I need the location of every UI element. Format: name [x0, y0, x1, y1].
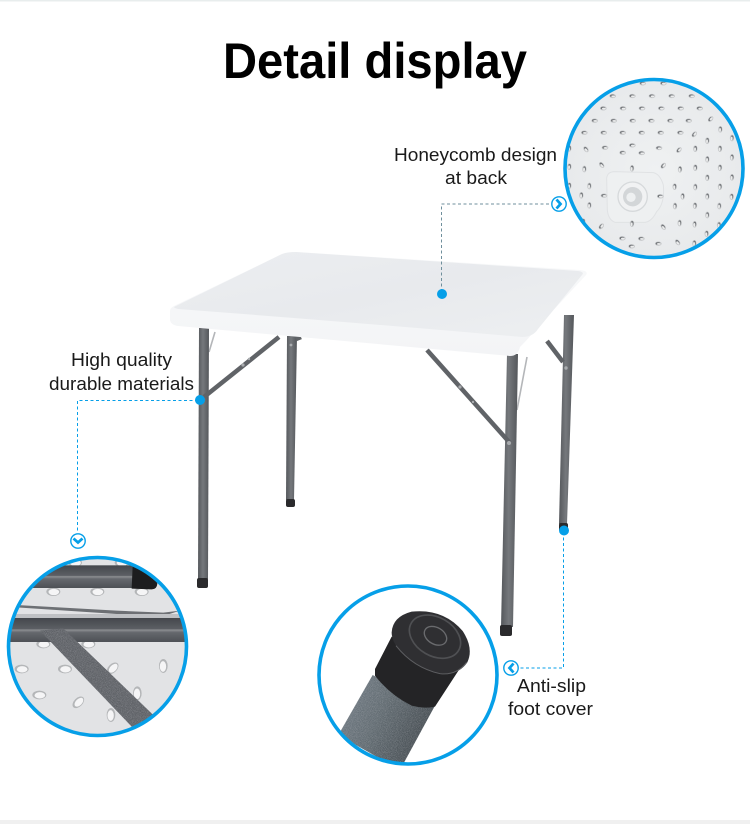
title: Detail display: [223, 33, 527, 89]
icon: down chevron: [71, 534, 85, 548]
marker dot: [559, 526, 569, 536]
folding table: [170, 252, 587, 636]
folding struts: [204, 337, 563, 443]
label: durable materials: High quality: [71, 350, 172, 370]
thin brace rods: [209, 320, 572, 410]
thin brace: [20, 605, 178, 614]
main tube: [7, 618, 187, 642]
rubber sleeve: [375, 637, 467, 708]
honeycomb dimples: [567, 81, 734, 248]
flat strut: [40, 628, 153, 728]
detail circle: rubber foot: [315, 582, 501, 770]
label: anti-slip foot cover: [508, 676, 593, 719]
callout: honeycomb design: [394, 145, 566, 299]
upper tube: [33, 565, 133, 588]
label: anti-slip foot cover: Anti-slip: [517, 676, 586, 696]
rubber cap rim: [392, 611, 470, 673]
dashed leader: [519, 532, 564, 668]
label: honeycomb design: Honeycomb design: [394, 145, 557, 165]
detail circle: steel frame: [5, 555, 190, 740]
dashed leader: [78, 400, 198, 533]
strut bolts: [241, 344, 568, 445]
label: anti-slip foot cover: foot cover: [508, 699, 593, 719]
table top: [170, 252, 587, 356]
rubber feet: [197, 499, 568, 636]
label: durable materials: durable materials: [49, 374, 194, 394]
dashed leader: [442, 204, 551, 292]
steel leg: [340, 675, 434, 762]
icon: left chevron: [504, 661, 518, 675]
black end cap: [132, 566, 157, 589]
label: honeycomb design: [394, 145, 557, 188]
underside dimples: [15, 558, 168, 722]
callout: anti-slip foot cover: [504, 526, 593, 719]
label: durable materials: [49, 350, 194, 394]
central mounting boss: [601, 172, 664, 227]
detail circle: honeycomb underside: [560, 75, 750, 265]
cap rings: [408, 614, 462, 659]
label: honeycomb design: at back: [445, 168, 508, 188]
callout: durable materials: [49, 350, 205, 548]
table legs: [198, 315, 574, 627]
marker dot: [195, 395, 205, 405]
icon: right chevron: [552, 197, 566, 211]
marker dot: [437, 289, 447, 299]
